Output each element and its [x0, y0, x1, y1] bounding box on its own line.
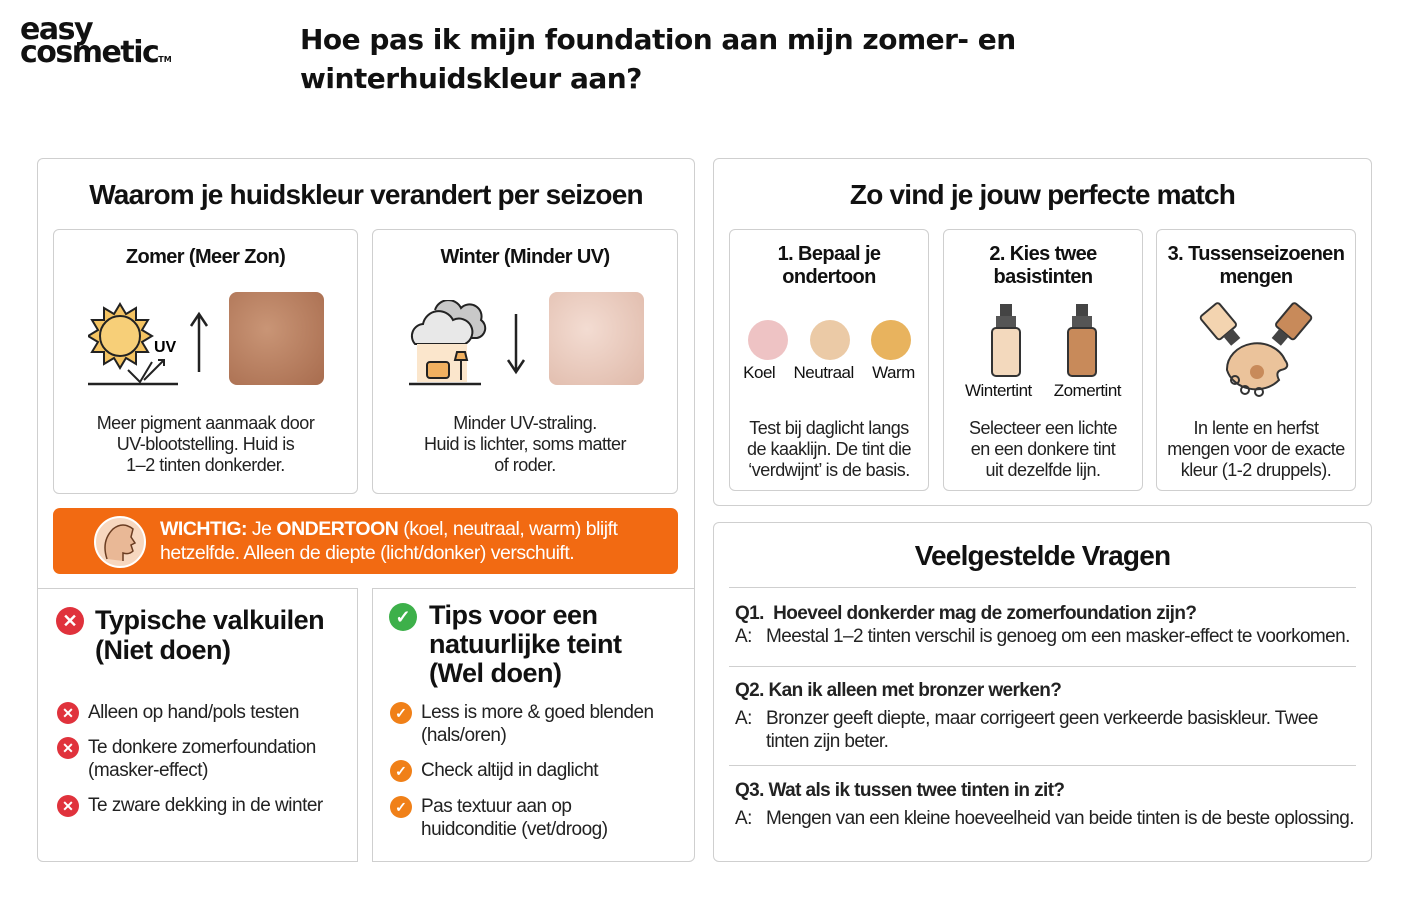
card: step 2: Zomertint: [1054, 381, 1121, 400]
panel: tips: Pas textuur aan op: [421, 796, 572, 817]
card: winter: [372, 229, 678, 494]
faq Q1: [735, 603, 1350, 647]
panel: tips: ✓: [395, 799, 407, 815]
card: step 1: [729, 229, 929, 491]
panel: tips: ✓: [395, 763, 407, 779]
card: step 1: Koel: [743, 363, 775, 382]
heading: Waarom je huidskleur verandert per seizoen: [89, 179, 643, 210]
faq Q2: Bronzer geeft diepte, maar corrigeert geen verkeerde basiskleur. Twee tinten zijn beter.: [766, 708, 1318, 752]
card: summer: UV-blootstelling. Huid is: [117, 434, 294, 454]
panel: tips: [372, 588, 695, 862]
card: step 3: kleur (1-2 druppels).: [1181, 460, 1331, 480]
card: step 1: Test bij daglicht langs: [749, 418, 909, 438]
panel: pitfalls: (masker-effect): [88, 760, 208, 781]
panel: tips: (Wel doen): [429, 658, 562, 688]
card: step 1: Warm: [872, 363, 915, 382]
title: winterhuidskleur aan?: [300, 62, 642, 95]
panel: perfect match: [713, 158, 1372, 506]
panel: pitfalls: ✕: [62, 705, 74, 721]
callout: important: hetzelfde. Alleen de diepte (licht/donker) verschuift.: [160, 542, 574, 564]
card: summer: Meer pigment aanmaak door: [97, 413, 314, 433]
panel: pitfalls: (Niet doen): [95, 635, 230, 665]
card: step 3: mengen: [1219, 266, 1293, 288]
card: step 1: 1. Bepaal je: [778, 243, 880, 265]
panel: tips: ✓: [395, 607, 411, 627]
icon: palette mixing: [1200, 302, 1312, 397]
card: step 2: 2. Kies twee: [989, 243, 1097, 265]
panel: pitfalls: Typische valkuilen: [95, 605, 324, 635]
card: step 2: Selecteer een lichte: [969, 418, 1117, 438]
heading: [56, 605, 324, 665]
panel: pitfalls: Alleen op hand/pols testen: [88, 702, 299, 723]
card: step 3: In lente en herfst: [1193, 418, 1319, 438]
card: step 2: basistinten: [994, 266, 1092, 288]
panel: pitfalls: [37, 588, 358, 862]
heading: Veelgestelde Vragen: [915, 540, 1170, 571]
panel: pitfalls: ✕: [62, 611, 78, 631]
panel: tips: Less is more & goed blenden: [421, 702, 654, 723]
card: step 3: 3. Tussenseizoenen: [1168, 243, 1344, 265]
heading: [389, 600, 622, 688]
card: winter: Minder UV-straling.: [453, 413, 597, 433]
skin swatch summer: [229, 292, 324, 385]
icon: sun UV: UV: [154, 339, 177, 356]
panel: FAQ: [713, 522, 1372, 862]
panel: tips: Check altijd in daglicht: [421, 760, 598, 781]
card: step 2: en een donkere tint: [971, 439, 1115, 459]
icon: cloud indoor: [409, 300, 525, 386]
panel: tips: Tips voor een: [429, 600, 598, 630]
skin swatch winter: [549, 292, 644, 385]
logo: easy: [20, 12, 92, 47]
card: step 1: Neutraal: [794, 363, 854, 382]
title: Hoe pas ik mijn foundation aan mijn zomer- en: [300, 23, 1016, 56]
panel: tips: ✓: [395, 705, 407, 721]
card: step 2: Wintertint: [965, 381, 1032, 400]
card: step 3: [1156, 229, 1356, 491]
panel: why skin changes: [37, 158, 695, 589]
panel: pitfalls: ✕: [62, 798, 74, 814]
card: winter: of roder.: [494, 455, 556, 475]
card: winter: Winter (Minder UV): [440, 246, 610, 268]
logo: [20, 12, 172, 70]
faq Q1: A:: [735, 626, 752, 647]
faq Q1: Meestal 1–2 tinten verschil is genoeg om een masker-effect te voorkomen.: [766, 626, 1350, 647]
card: step 2: uit dezelfde lijn.: [985, 460, 1101, 480]
card: step 2: [943, 229, 1143, 491]
faq Q1: Q1. Hoeveel donkerder mag de zomerfoundation zijn?: [735, 603, 1196, 624]
faq Q2: Q2. Kan ik alleen met bronzer werken?: [735, 680, 1061, 701]
logo: cosmeticTM: [20, 35, 172, 70]
panel: tips: natuurlijke teint: [429, 629, 622, 659]
faq Q3: A:: [735, 808, 752, 829]
card: winter: Huid is lichter, soms matter: [424, 434, 626, 454]
undertone swatches: [748, 320, 788, 360]
title: [300, 23, 1016, 95]
icon: sun UV: [88, 302, 208, 386]
faq Q2: [735, 680, 1318, 752]
card: summer: 1–2 tinten donkerder.: [126, 455, 285, 475]
card: step 1: ‘verdwijnt’ is de basis.: [748, 460, 910, 480]
faq Q2: A:: [735, 708, 752, 729]
callout: important: WICHTIG: Je ONDERTOON (koel, neutraal, warm) blijft: [160, 518, 617, 540]
panel: tips: (hals/oren): [421, 725, 506, 746]
panel: pitfalls: Te donkere zomerfoundation: [88, 737, 316, 758]
icon: bottles: [991, 304, 1097, 377]
card: summer: Zomer (Meer Zon): [126, 246, 285, 268]
card: step 1: ondertoon: [782, 266, 876, 288]
faq Q3: Q3. Wat als ik tussen twee tinten in zit?: [735, 780, 1064, 801]
faq Q3: [735, 780, 1354, 829]
faq Q3: Mengen van een kleine hoeveelheid van beide tinten is de beste oplossing.: [766, 808, 1354, 829]
callout: important: [53, 508, 678, 574]
panel: tips: huidconditie (vet/droog): [421, 819, 608, 840]
card: step 3: mengen voor de exacte: [1167, 439, 1345, 459]
heading: Zo vind je jouw perfecte match: [850, 179, 1235, 210]
card: step 1: de kaaklijn. De tint die: [747, 439, 911, 459]
icon: face: [94, 516, 146, 568]
panel: pitfalls: Te zware dekking in de winter: [88, 795, 323, 816]
card: summer: [53, 229, 358, 494]
panel: pitfalls: ✕: [62, 740, 74, 756]
